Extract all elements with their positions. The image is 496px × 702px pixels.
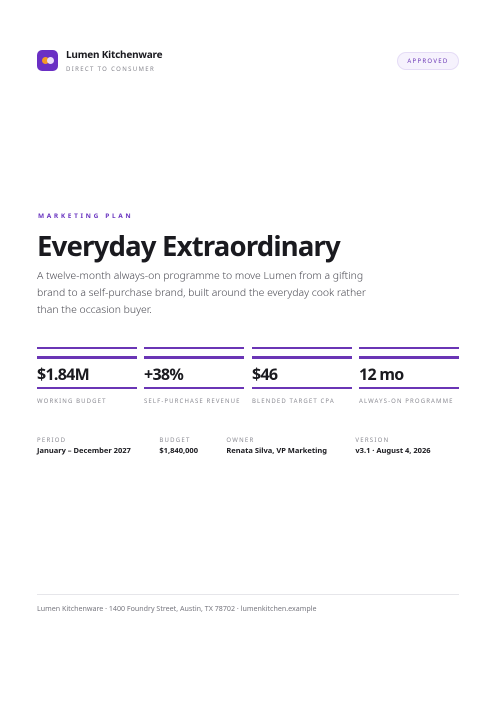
subtitle: brand to a self-purchase brand, built around the everyday cook rather (37, 286, 366, 300)
KPI: always-on programme (359, 347, 459, 405)
KPI: always-on programme: ALWAYS-ON PROGRAMME (359, 397, 454, 405)
status badge: APPROVED (407, 57, 449, 65)
footer text: Lumen Kitchenware · 1400 Foundry Street, Austin, TX 78702 · lumenkitchen.example (37, 604, 317, 614)
meta: budget: $1,840,000 (159, 446, 198, 456)
meta: budget (159, 436, 198, 456)
meta: version: v3.1 · August 4, 2026 (355, 446, 431, 456)
subtitle: A twelve-month always-on programme to move Lumen from a gifting (37, 269, 363, 283)
KPI: always-on programme: 12 mo (359, 363, 404, 385)
status badge (397, 52, 459, 70)
KPI: blended target CPA: BLENDED TARGET CPA (252, 397, 335, 405)
meta: period: January – December 2027 (37, 446, 131, 456)
header brand (37, 47, 162, 73)
KPI: working budget: WORKING BUDGET (37, 397, 107, 405)
KPI: self-purchase revenue (144, 347, 244, 405)
meta: period (36, 436, 131, 456)
meta: owner: OWNER (226, 436, 254, 444)
meta: period: PERIOD (37, 436, 66, 444)
meta: version: VERSION (355, 436, 389, 444)
meta: owner: Renata Silva, VP Marketing (226, 446, 327, 456)
brand name: Lumen Kitchenware (66, 47, 162, 61)
title: Everyday Extraordinary (37, 228, 340, 265)
KPI: self-purchase revenue: +38% (144, 363, 183, 385)
eyebrow label: MARKETING PLAN (38, 211, 133, 220)
meta: owner (226, 436, 327, 456)
KPI: self-purchase revenue: SELF-PURCHASE REVENUE (144, 397, 241, 405)
KPI: working budget (37, 347, 137, 405)
icon: brand logo (37, 50, 58, 71)
brand tagline: DIRECT TO CONSUMER (66, 65, 155, 73)
subtitle: than the occasion buyer. (37, 303, 152, 317)
meta: version (355, 436, 431, 456)
KPI: blended target CPA (252, 347, 352, 405)
subtitle (37, 269, 366, 317)
KPI: working budget: $1.84M (37, 363, 89, 385)
KPI: blended target CPA: $46 (252, 363, 277, 385)
meta: budget: BUDGET (159, 436, 191, 444)
